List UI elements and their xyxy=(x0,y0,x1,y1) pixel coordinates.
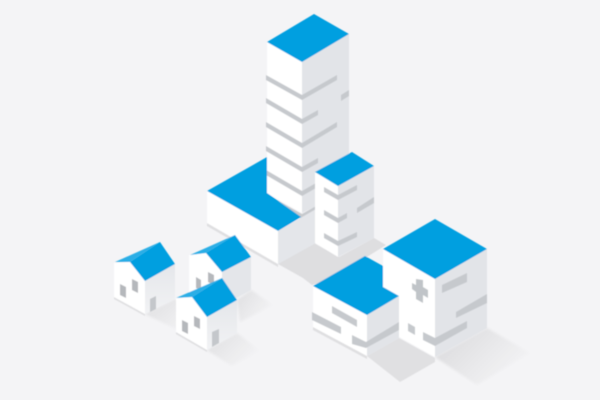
house 3 roof xyxy=(176,278,222,298)
ground shadow: houses xyxy=(145,290,273,366)
annex right face xyxy=(278,209,316,264)
small tower xyxy=(315,152,374,257)
clinic window bands xyxy=(312,306,399,348)
house back right xyxy=(189,235,251,310)
hospital cross xyxy=(412,279,428,303)
house 3 right wall xyxy=(207,300,237,350)
house 3 front wall xyxy=(176,297,207,350)
low clinic xyxy=(312,256,399,356)
clinic right face xyxy=(367,296,399,356)
ground shadow: hospital xyxy=(435,328,530,385)
small tower right face xyxy=(338,166,374,257)
small tower window bands xyxy=(324,185,374,246)
hospital roof xyxy=(383,219,487,279)
tower roof xyxy=(267,14,349,62)
house 2 roof xyxy=(190,235,235,255)
house 1 windows xyxy=(120,279,138,298)
hospital window bands xyxy=(423,273,487,346)
clinic roof xyxy=(313,256,399,315)
house 2 front wall xyxy=(189,253,222,310)
annex left face xyxy=(207,191,278,264)
house 1 roof xyxy=(115,242,160,262)
house 1 front wall xyxy=(114,262,145,314)
small tower left face xyxy=(315,172,338,257)
tower right face xyxy=(302,34,349,213)
hospital small window xyxy=(408,323,415,335)
annex roof xyxy=(207,157,301,231)
house 1 right wall xyxy=(145,264,175,314)
base contact shadows xyxy=(114,223,367,359)
house 3 windows xyxy=(182,316,200,334)
house 2 right wall xyxy=(222,257,251,306)
tall tower xyxy=(266,14,349,219)
low annex block xyxy=(207,157,316,264)
house left xyxy=(114,242,175,314)
hospital right face xyxy=(435,249,487,357)
house 3 door xyxy=(212,329,219,347)
tower left face xyxy=(267,42,302,213)
hospital left face xyxy=(383,249,435,357)
clinic left face xyxy=(313,286,367,356)
house 2 windows xyxy=(196,272,214,290)
small tower roof xyxy=(315,152,374,186)
ground shadow: low clinic xyxy=(367,338,435,382)
house front xyxy=(176,278,237,350)
ground shadow: central buildings xyxy=(278,238,386,285)
hospital xyxy=(383,219,487,357)
house 1 door xyxy=(150,296,156,312)
tower window bands xyxy=(266,75,349,219)
